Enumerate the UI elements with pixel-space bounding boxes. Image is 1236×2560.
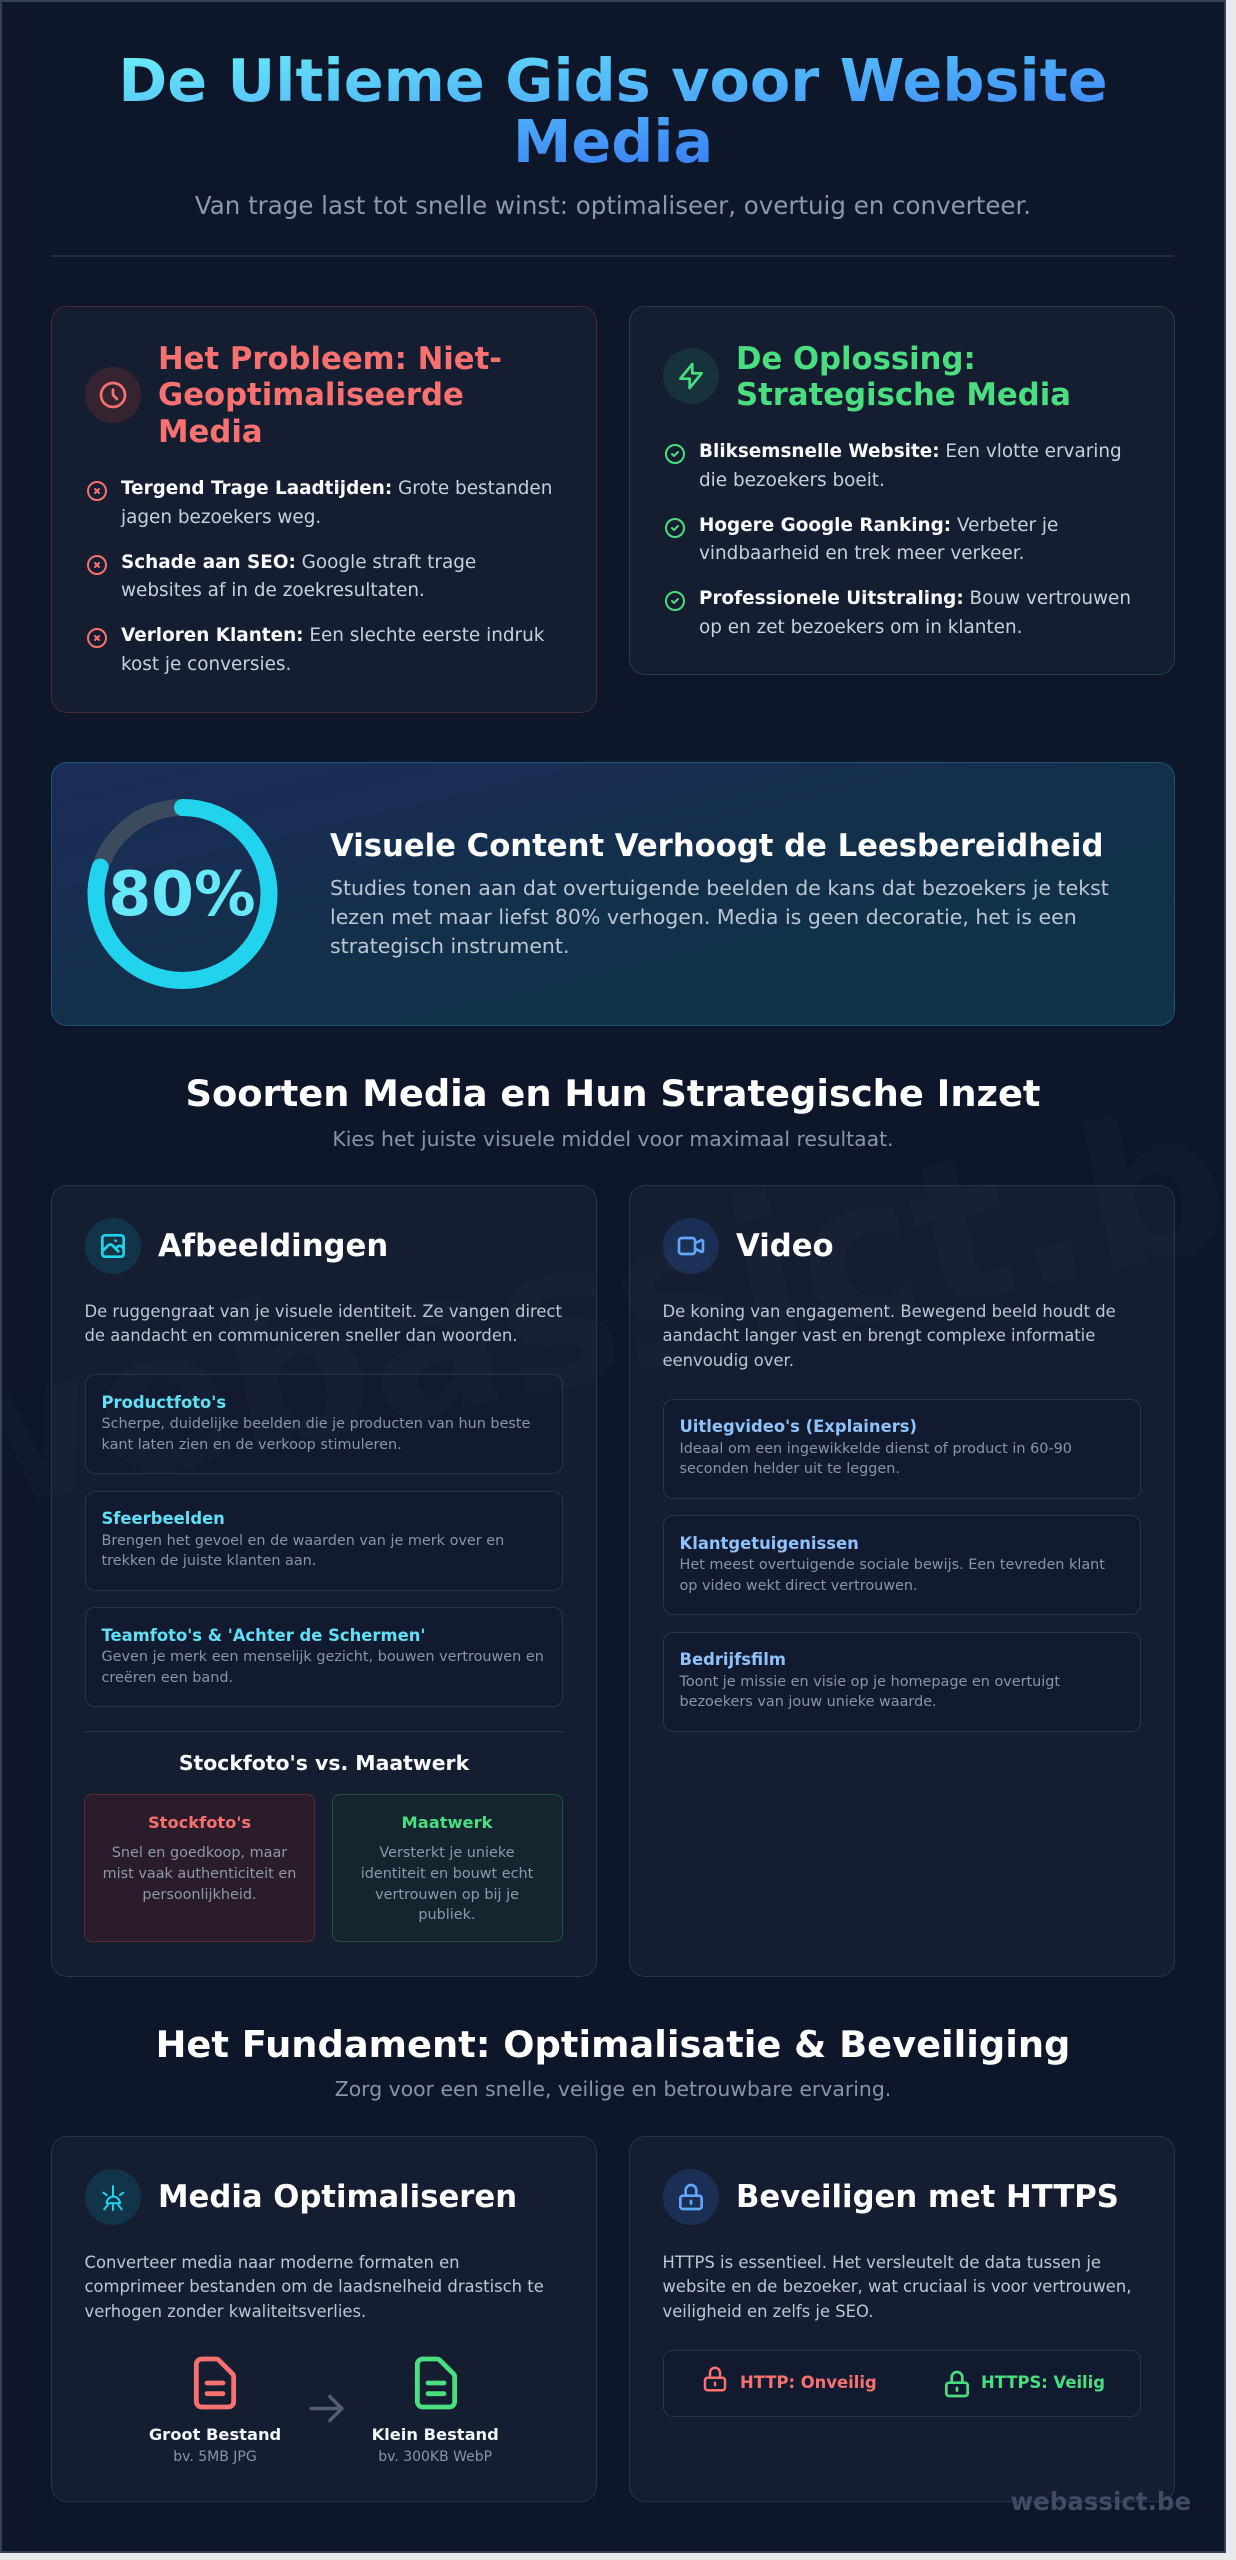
text: afbeeldingen intro: De ruggengraat van je visuele identiteit. Ze vangen direct — [84, 1302, 562, 1320]
icon: lock — [663, 2169, 719, 2225]
icon: check circle — [665, 518, 685, 538]
heading: de oplossing — [736, 342, 1071, 413]
list item: laadtijden — [120, 478, 552, 528]
text: video intro — [662, 1302, 1116, 1370]
item: productfoto's — [84, 1374, 562, 1474]
heading: het probleem: Het Probleem: Niet- — [158, 342, 502, 376]
list item: website — [699, 441, 1122, 491]
list item: klanten: kost je conversies. — [121, 654, 291, 675]
heading: het probleem: Geoptimaliseerde — [158, 378, 464, 413]
comparison: stockfoto's: persoonlijkheid. — [142, 1887, 257, 1903]
panel: video — [629, 1185, 1175, 1977]
text: https intro: veiligheid en zelfs je SEO. — [662, 2302, 874, 2321]
chart: 80% ring — [88, 799, 278, 989]
subheading: soorten media: Kies het juiste visuele middel voor maximaal resultaat. — [332, 1126, 894, 1150]
panel: afbeeldingen — [51, 1185, 597, 1977]
text: afbeeldingen intro: de aandacht en communiceren sneller dan woorden. — [84, 1326, 518, 1345]
text: optimaliseren intro: Converteer media naar moderne formaten en — [84, 2252, 460, 2272]
item: klantgetuigenissen: op video wekt direct vertrouwen. — [680, 1578, 918, 1594]
list item: seo — [121, 552, 476, 601]
item: uitlegvideo's: seconden helder uit te leggen. — [680, 1461, 900, 1477]
item: productfoto's: Productfoto's — [102, 1392, 226, 1412]
item: klantgetuigenissen: Klantgetuigenissen — [680, 1534, 859, 1552]
text: https intro: website en de bezoeker, wat cruciaal is voor vertrouwen, — [662, 2277, 1131, 2296]
text: https intro — [662, 2252, 1131, 2321]
item: uitlegvideo's — [662, 1398, 1140, 1498]
icon: clock — [85, 367, 141, 423]
item: productfoto's: kant laten zien en de verkoop stimuleren. — [102, 1437, 402, 1453]
icon: video — [663, 1218, 719, 1274]
list item: website: Bliksemsnelle Website: Een vlotte ervaring — [699, 441, 1122, 462]
item: bedrijfsfilm: bezoekers van jouw unieke waarde. — [680, 1694, 937, 1710]
comparison: stockfoto's: Stockfoto's — [148, 1812, 251, 1832]
heading: https: Beveiligen met HTTPS — [736, 2180, 1119, 2215]
list item: seo: Schade aan SEO: Google straft trage — [121, 552, 476, 573]
heading: het fundament: Het Fundament: Optimalisatie & Beveiliging — [156, 2023, 1070, 2066]
text: video intro: eenvoudig over. — [662, 1351, 794, 1370]
item: teamfoto's — [84, 1607, 562, 1707]
item: uitlegvideo's: Uitlegvideo's (Explainers) — [680, 1417, 917, 1436]
title — [51, 51, 1175, 173]
list item: uitstraling: Professionele Uitstraling: Bouw vertrouwen — [699, 588, 1131, 609]
text: https intro: HTTPS is essentieel. Het versleutelt de data tussen je — [662, 2252, 1101, 2272]
text: optimaliseren intro: comprimeer bestanden om de laadsnelheid drastisch te — [84, 2277, 544, 2296]
label: 5MB JPG: bv. 5MB JPG — [173, 2449, 257, 2465]
comparison: maatwerk — [332, 1794, 562, 1942]
icon: check circle — [665, 444, 685, 464]
icon: image — [85, 1218, 141, 1274]
list item: uitstraling — [699, 588, 1131, 638]
panel: het probleem — [51, 306, 597, 713]
text: optimaliseren intro — [84, 2252, 544, 2321]
item: bedrijfsfilm: Toont je missie en visie op je homepage en overtuigt — [680, 1674, 1060, 1690]
banner text: strategisch instrument. — [330, 934, 569, 958]
label: 300KB WebP: bv. 300KB WebP — [378, 2449, 492, 2465]
icon: green lock — [945, 2370, 969, 2398]
icon: bolt — [663, 348, 719, 404]
subheading: het fundament: Zorg voor een snelle, veilige en betrouwbare ervaring. — [335, 2077, 891, 2101]
text: video intro: De koning van engagement. Bewegend beeld houdt de — [662, 1302, 1116, 1320]
list item: ranking — [699, 515, 1058, 564]
item: teamfoto's: Geven je merk een menselijk gezicht, bouwen vertrouwen en — [102, 1649, 544, 1665]
heading: soorten media: Soorten Media en Hun Strategische Inzet — [186, 1072, 1040, 1115]
box: http vs https — [662, 2350, 1140, 2417]
list item: klanten — [121, 625, 544, 675]
panel: beveiligen met https — [629, 2136, 1175, 2502]
item: bedrijfsfilm: Bedrijfsfilm — [680, 1650, 786, 1669]
comparison: stockfoto's — [84, 1794, 315, 1942]
subtitle: Van trage last tot snelle winst: optimaliseer, overtuig en converteer. — [195, 191, 1031, 220]
heading: de oplossing: Strategische Media — [736, 378, 1071, 413]
stat: 80%: 80% — [108, 858, 256, 930]
list item: laadtijden: Tergend Trage Laadtijden: Grote bestanden — [121, 478, 552, 499]
heading: stockfoto's vs maatwerk: Stockfoto's vs. Maatwerk — [179, 1750, 469, 1774]
list item: ranking: Hogere Google Ranking: Verbeter je — [699, 515, 1058, 536]
icon: small file — [414, 2356, 458, 2410]
label: groot bestand: Groot Bestand — [149, 2425, 281, 2444]
title: De Ultieme Gids voor Website — [118, 46, 1108, 115]
panel: de oplossing — [629, 306, 1175, 675]
heading: de oplossing: De Oplossing: — [736, 342, 976, 376]
list item: ranking: vindbaarheid en trek meer verkeer. — [699, 543, 1024, 564]
icon: check circle — [665, 591, 685, 611]
label: https veilig: HTTPS: Veilig — [981, 2373, 1105, 2392]
item: teamfoto's: creëren een band. — [102, 1670, 233, 1686]
list item: website: die bezoekers boeit. — [699, 470, 885, 491]
arrow — [310, 2394, 344, 2422]
panel: media optimaliseren — [51, 2136, 597, 2502]
text: optimaliseren intro: verhogen zonder kwaliteitsverlies. — [84, 2302, 366, 2321]
banner text: lezen met maar liefst 80% verhogen. Media is geen decoratie, het is een — [330, 905, 1077, 929]
comparison: maatwerk: Maatwerk — [402, 1812, 492, 1832]
item: uitlegvideo's: Ideaal om een ingewikkelde dienst of product in 60-90 — [680, 1440, 1072, 1456]
item: bedrijfsfilm — [662, 1632, 1140, 1732]
title: Media — [513, 106, 713, 176]
comparison: stockfoto's: mist vaak authenticiteit en — [103, 1866, 296, 1882]
item: teamfoto's: Teamfoto's & 'Achter de Schermen' — [102, 1626, 425, 1645]
heading: het probleem: Media — [158, 415, 263, 450]
list item: uitstraling: op en zet bezoekers om in klanten. — [699, 617, 1022, 638]
banner text — [330, 876, 1109, 958]
item: sfeerbeelden — [84, 1491, 562, 1591]
text: afbeeldingen intro — [84, 1302, 562, 1345]
banner heading: Visuele Content Verhoogt de Leesbereidheid — [330, 828, 1103, 864]
icon: x circle — [87, 628, 107, 648]
icon: x circle — [87, 481, 107, 501]
heading: afbeeldingen: Afbeeldingen — [158, 1229, 388, 1264]
comparison: maatwerk: identiteit en bouwt echt — [361, 1866, 533, 1882]
panel: 80% banner — [51, 762, 1175, 1026]
banner text: Studies tonen aan dat overtuigende beelden de kans dat bezoekers je tekst — [330, 876, 1109, 900]
icon: large file — [194, 2356, 236, 2410]
item: sfeerbeelden: Brengen het gevoel en de waarden van je merk over en — [102, 1533, 504, 1549]
list item: laadtijden: jagen bezoekers weg. — [121, 507, 321, 528]
comparison: maatwerk: publiek. — [418, 1907, 476, 1923]
icon: x circle — [87, 555, 107, 575]
heading: het probleem — [158, 342, 502, 450]
item: sfeerbeelden: trekken de juiste klanten aan. — [102, 1553, 316, 1569]
heading: media optimaliseren: Media Optimaliseren — [158, 2180, 517, 2215]
label: http onveilig: HTTP: Onveilig — [740, 2373, 877, 2392]
heading: video: Video — [736, 1229, 834, 1264]
icon: red lock — [704, 2366, 726, 2392]
footer brand: webassict.be — [1010, 2487, 1191, 2516]
comparison: maatwerk: Versterkt je unieke — [379, 1845, 515, 1861]
item: klantgetuigenissen: Het meest overtuigende sociale bewijs. Een tevreden klant — [680, 1557, 1105, 1573]
text: video intro: aandacht langer vast en brengt complexe informatie — [662, 1326, 1095, 1345]
item: klantgetuigenissen — [662, 1515, 1140, 1615]
list item: klanten: Verloren Klanten: Een slechte eerste indruk — [121, 625, 544, 646]
comparison: stockfoto's: Snel en goedkoop, maar — [112, 1845, 287, 1861]
item: productfoto's: Scherpe, duidelijke beelden die je producten van hun beste — [102, 1416, 530, 1432]
list item: seo: websites af in de zoekresultaten. — [121, 580, 425, 601]
item: sfeerbeelden: Sfeerbeelden — [102, 1509, 225, 1528]
label: klein bestand: Klein Bestand — [372, 2425, 499, 2444]
icon: optimise — [85, 2169, 141, 2225]
comparison: maatwerk: vertrouwen op bij je — [375, 1887, 519, 1903]
